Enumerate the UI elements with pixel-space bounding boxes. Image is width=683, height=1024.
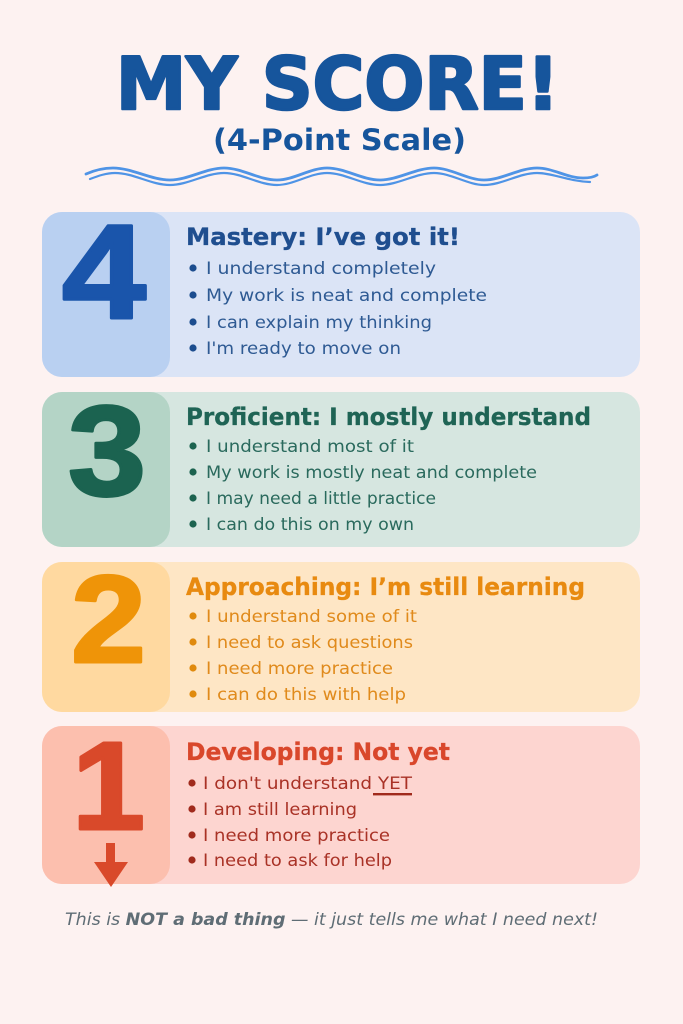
bullet list: mastery: [189, 259, 487, 359]
panel: level 1 developing: [42, 717, 640, 887]
bullet list: mastery: I can explain my thinking: [206, 313, 432, 333]
bullet list: mastery: My work is neat and complete: [206, 286, 487, 306]
number tile 2: [42, 562, 170, 712]
number tile 1: [42, 726, 170, 884]
bullet list: proficient: [189, 437, 537, 535]
bullet list: proficient: I may need a little practice: [206, 489, 436, 509]
bullet list: approaching: I need to ask questions: [206, 633, 413, 653]
bullet list: proficient: I can do this on my own: [206, 515, 414, 535]
heading: approaching: Approaching: I’m still learning: [186, 573, 585, 601]
bullet list: mastery: I'm ready to move on: [206, 339, 401, 359]
wavy underline: [86, 168, 597, 185]
panel: level 2 approaching: [42, 551, 640, 712]
bullet list: developing: I need more practice: [203, 826, 390, 846]
bullet list: approaching: I need more practice: [206, 659, 393, 679]
bullet list: developing: I am still learning: [203, 800, 357, 820]
subtitle: (4-Point Scale): [213, 123, 466, 157]
bullet list: approaching: I understand some of it: [206, 607, 417, 627]
numeral 4: 4: [62, 198, 146, 347]
title: MY SCORE!: [116, 42, 559, 126]
heading: developing: Developing: Not yet: [186, 738, 450, 766]
bullet list: proficient: I understand most of it: [206, 437, 414, 457]
footer note: This is NOT a bad thing — it just tells me what I need next!: [65, 910, 598, 930]
bullet list: developing: I don't understand YET: [203, 774, 413, 794]
panel: level 4 mastery: [42, 198, 640, 377]
heading: proficient: Proficient: I mostly understand: [186, 403, 591, 431]
bullet list: developing: [188, 774, 413, 871]
bullet list: approaching: [189, 607, 417, 705]
numeral 1: 1: [72, 717, 145, 856]
number tile 4: [42, 212, 170, 377]
bullet list: proficient: My work is mostly neat and complete: [206, 463, 537, 483]
bullet list: approaching: I can do this with help: [206, 685, 406, 705]
icon: down arrow: [94, 843, 128, 887]
bullet list: developing: I need to ask for help: [203, 851, 392, 871]
number tile 3: [42, 392, 170, 547]
numeral 3: 3: [68, 380, 146, 523]
heading: mastery: Mastery: I’ve got it!: [186, 223, 460, 251]
panel: level 3 proficient: [42, 380, 640, 547]
bullet list: mastery: I understand completely: [206, 259, 436, 279]
numeral 2: 2: [71, 551, 146, 689]
